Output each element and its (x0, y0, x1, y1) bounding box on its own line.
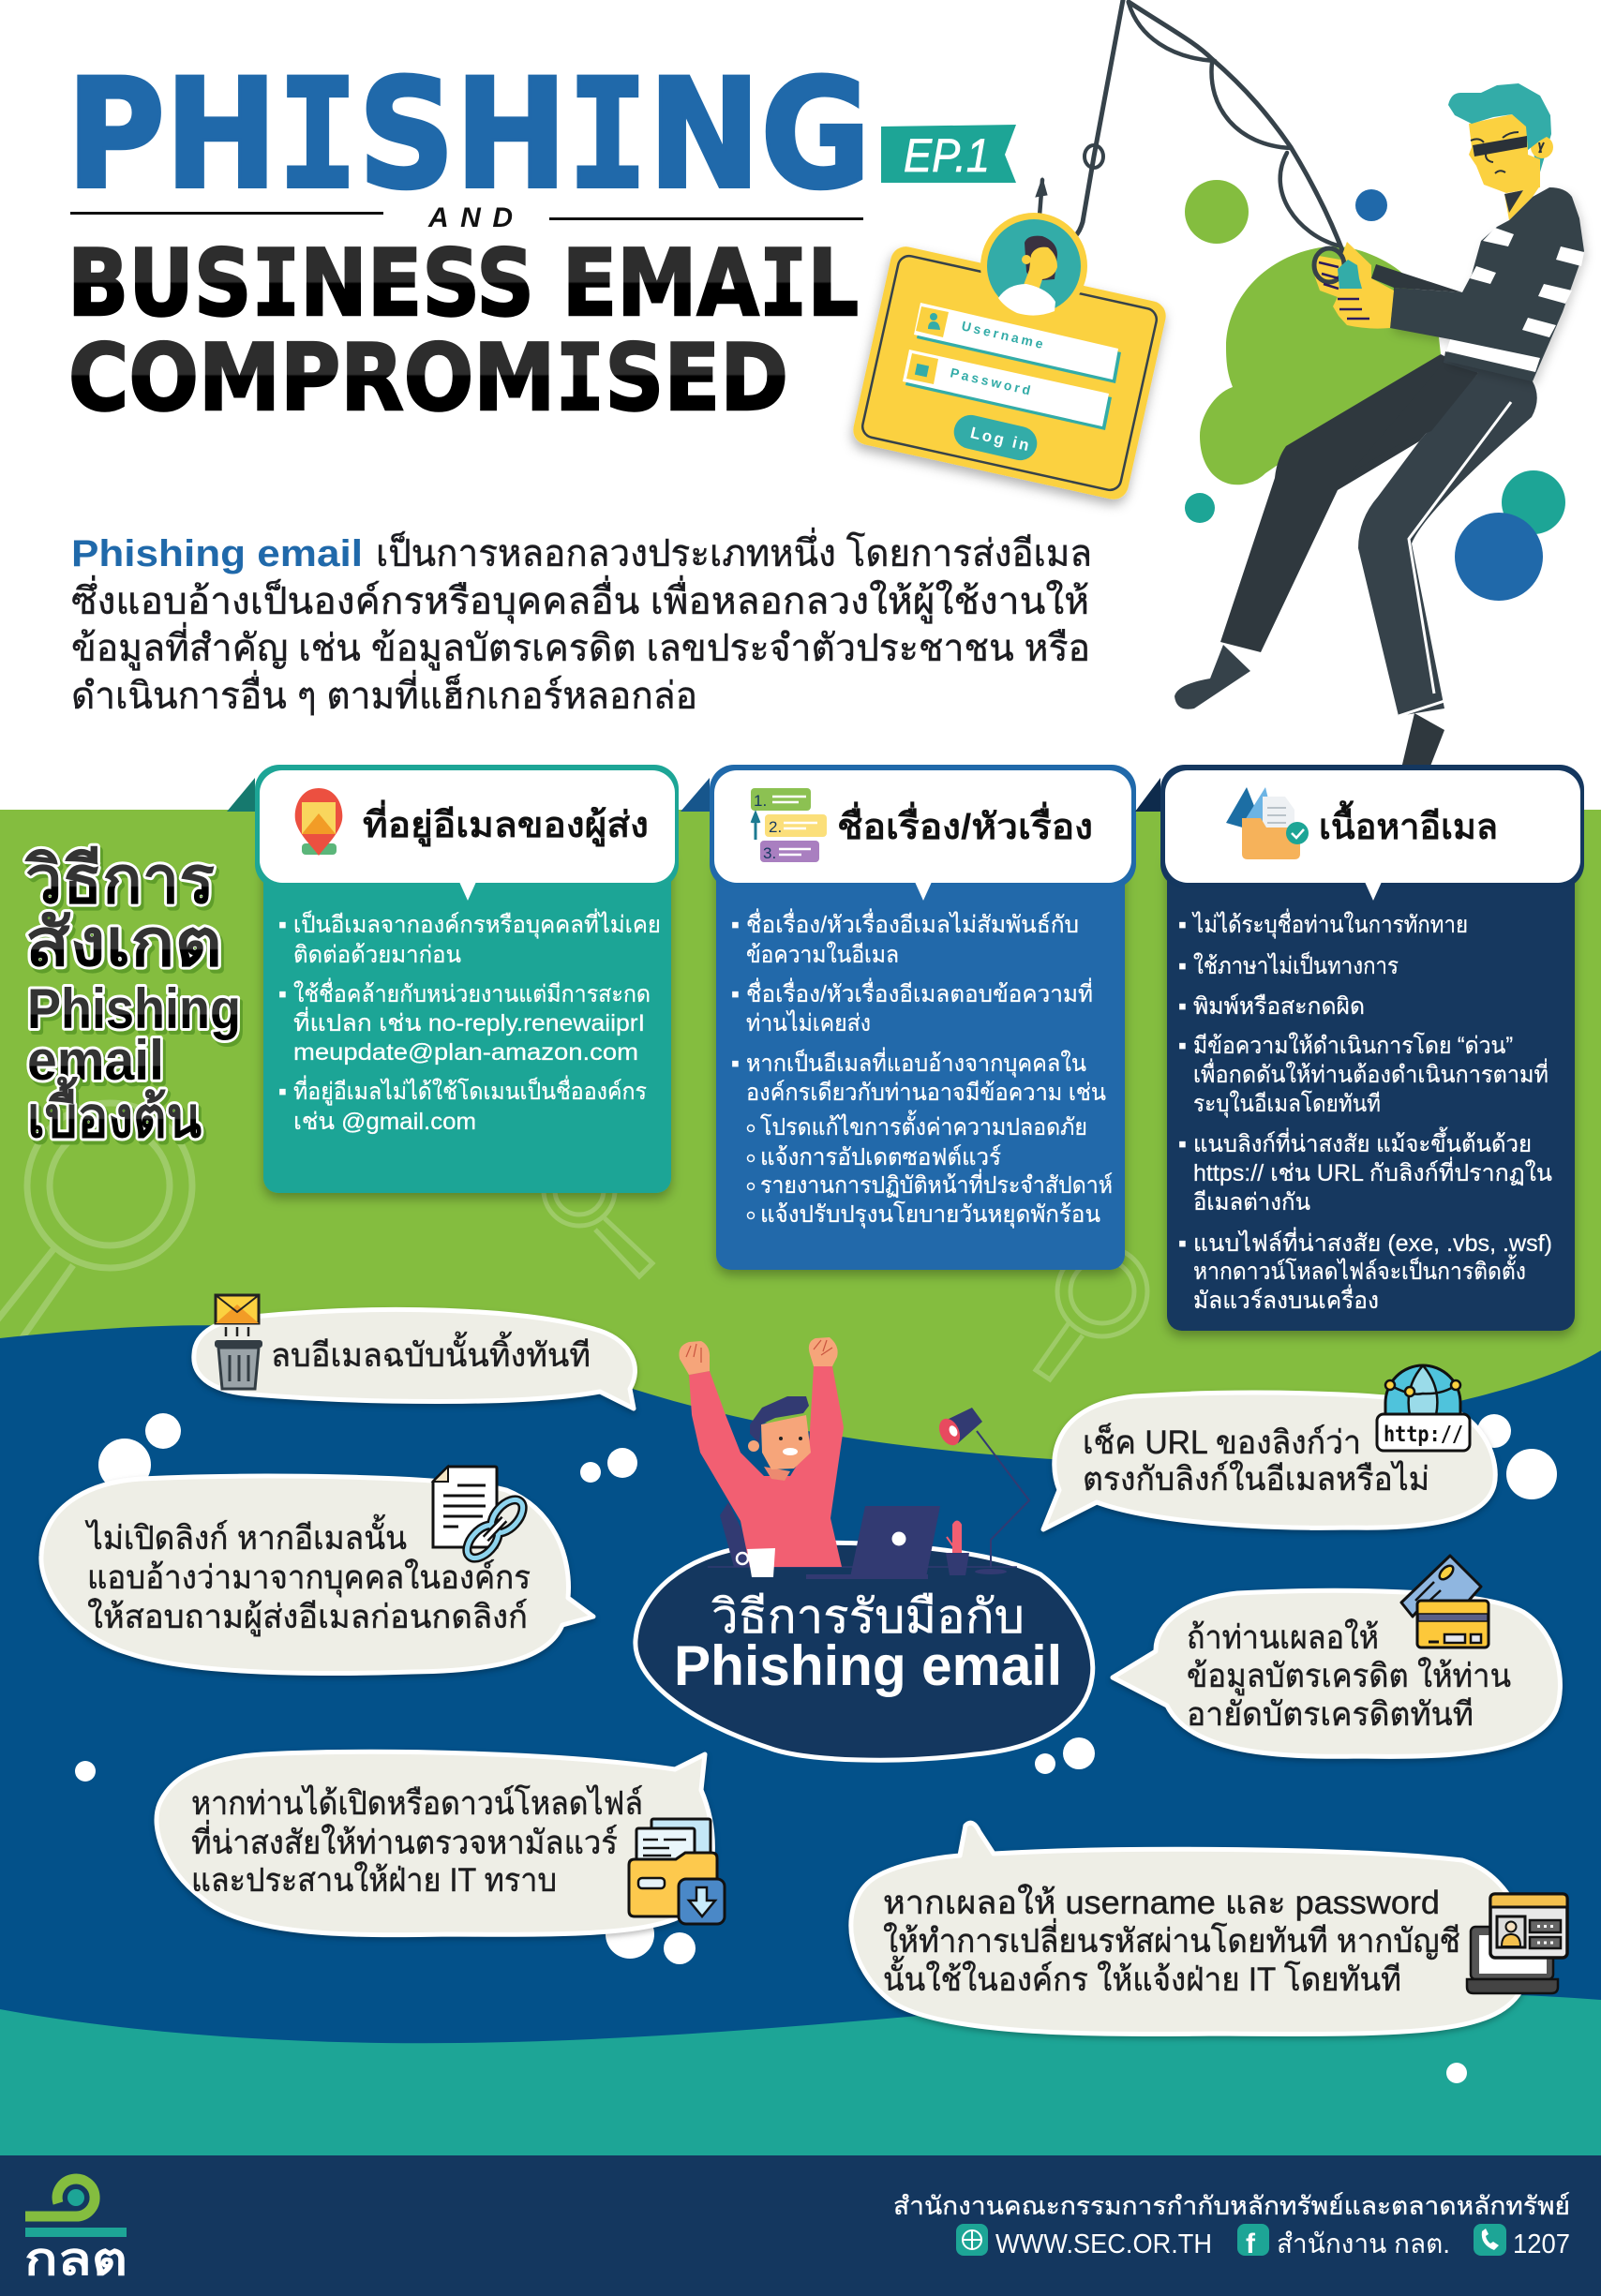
center bubble: how to respond: วิธีการรับมือกับ (711, 1590, 1025, 1643)
contact: facebook (1237, 2224, 1450, 2259)
table line (708, 1566, 1017, 1568)
contact: phone: 1207 (1513, 2229, 1570, 2259)
list: sender address: ▪ (278, 912, 287, 938)
panel: left heading: สังเกต (25, 906, 222, 979)
icon: credit cards (1401, 1556, 1489, 1647)
login button: Log in (968, 424, 1033, 455)
background: green section (0, 810, 1601, 1522)
intro paragraph (71, 528, 1092, 717)
icon: folder download (629, 1819, 725, 1924)
list: subject line: แจ้งปรับปรุงนโยบายวันหยุดพักร้อน (760, 1200, 1100, 1229)
username field (914, 303, 1121, 383)
list: subject line: หากเป็นอีเมลที่แอบอ้างจากบุคคลใน (746, 1047, 1086, 1078)
title: COMPROMISED: COMPROMISED (68, 325, 788, 432)
list: email content: ใช้ภาษาไม่เป็นทางการ (1193, 951, 1399, 979)
list: sender address: ที่แปลก เช่น no-reply.renewaiiprI (293, 1006, 645, 1036)
list: email content: แนบไฟล์ที่น่าสงสัย (exe, .vbs, .wsf) (1193, 1227, 1552, 1257)
panel: left heading (23, 843, 241, 1149)
list: sender address (278, 908, 661, 1135)
header: sender address: ที่อยู่อีเมลของผู้ส่ง (363, 799, 649, 847)
list: email content: ไม่ได้ระบุชื่อท่านในการทักทาย (1191, 908, 1468, 939)
head with mask (1448, 83, 1553, 220)
badge: EP.1 (881, 125, 1016, 183)
background: magnifier watermarks (0, 1103, 1147, 1379)
icon: location pin envelope (295, 788, 342, 856)
list: email content: มีข้อความให้ดำเนินการโดย “ด่วน” (1193, 1032, 1513, 1059)
list: subject line: ชื่อเรื่อง/หัวเรื่องอีเมลตอบข้อความที่ (746, 977, 1093, 1007)
illustration: login card on hook (850, 213, 1169, 502)
contact: phone (1474, 2224, 1570, 2259)
contact: website (956, 2224, 1212, 2259)
list: subject line: ▪ (731, 1051, 740, 1077)
header: subject line: ชื่อเรื่อง/หัวเรื่อง (837, 801, 1093, 847)
decorative white dots (75, 1413, 1557, 2083)
bubble: do not open link: แอบอ้างว่ามาจากบุคคลในองค์กร (87, 1558, 531, 1597)
list: email content: มัลแวร์ลงบนเครื่อง (1193, 1284, 1379, 1314)
cactus pot (946, 1522, 969, 1575)
neck (764, 1467, 790, 1481)
panel: left heading: Phishing (27, 977, 241, 1040)
list: email content: ▪ (1178, 1033, 1187, 1059)
bubble: do not open link: ให้สอบถามผู้ส่งอีเมลก่อนกดลิงก์ (87, 1598, 528, 1636)
password field: Password (949, 365, 1035, 398)
logo (24, 2179, 127, 2285)
background shapes (1185, 180, 1565, 601)
list: email content: พิมพ์หรือสะกดผิด (1193, 993, 1365, 1020)
sweater (689, 1366, 844, 1567)
bubble: delete email: ลบอีเมลฉบับนั้นทิ้งทันที (271, 1331, 591, 1374)
list: sender address: ▪ (278, 1079, 287, 1105)
panel: left heading: เบื้องต้น (27, 1076, 202, 1149)
title: AND with rules (70, 202, 863, 233)
background: blue wave (0, 1325, 1601, 2062)
icon: numbered list: 2. (769, 818, 782, 836)
list: email content: https:// เช่น URL กับลิงก์ที่ปรากฏใน (1193, 1156, 1552, 1186)
desk lamp (935, 1408, 1029, 1574)
icon: numbered list: 3. (763, 844, 776, 862)
header: email content (1160, 765, 1584, 901)
bubble: credit card: อายัดบัตรเครดิตทันที (1187, 1696, 1474, 1733)
list: sender address: เป็นอีเมลจากองค์กรหรือบุคคลที่ไม่เคย (293, 908, 661, 939)
panel: email content (1135, 765, 1584, 1331)
list: email content: หากดาวน์โหลดไฟล์จะเป็นการติดตั้ง (1193, 1254, 1526, 1285)
bubble: credit card (1113, 1556, 1560, 1756)
panel: subject line (681, 765, 1136, 1270)
reel and hand (1312, 242, 1394, 329)
list: email content: ▪ (1178, 1131, 1187, 1157)
logo: กลต (24, 2235, 127, 2285)
coffee mug (737, 1548, 775, 1577)
login button (950, 411, 1040, 464)
panel: left heading: วิธีการ (23, 843, 215, 917)
background: teal wave (0, 1993, 1601, 2165)
list: email content: แนบลิงก์ที่น่าสงสัย แม้จะขึ้นต้นด้วย (1193, 1126, 1532, 1157)
bubble: credit card: ข้อมูลบัตรเครดิต ให้ท่าน (1187, 1657, 1511, 1695)
bubble: changed password: นั้นใช้ในองค์กร ให้แจ้งฝ่าย IT โดยทันที (883, 1955, 1401, 1998)
icon: login window and laptop (1467, 1894, 1567, 1993)
list: subject line: รายงานการปฏิบัติหน้าที่ประจำสัปดาห์ (760, 1169, 1113, 1199)
card (850, 244, 1169, 502)
illustration: celebrating person at laptop (679, 1337, 1029, 1579)
list: subject line: ▪ (731, 912, 740, 938)
icon: document and chain link (433, 1467, 529, 1564)
username field: Username (960, 318, 1047, 352)
intro paragraph: ข้อมูลที่สำคัญ เช่น ข้อมูลบัตรเครดิต เลขประจำตัวประชาชน หรือ (71, 622, 1090, 670)
intro paragraph: ดำเนินการอื่น ๆ ตามที่แฮ็กเกอร์หลอกล่อ (71, 670, 697, 717)
list: sender address: ติดต่อด้วยมาก่อน (293, 942, 461, 968)
list: sender address: ที่อยู่อีเมลไม่ได้ใช้โดเมนเป็นชื่อองค์กร (293, 1075, 647, 1106)
bubble: delete email (194, 1295, 635, 1409)
header: sender address (255, 765, 679, 901)
center bubble: how to respond (636, 1543, 1093, 1760)
raised fists (679, 1341, 710, 1375)
fishing rod (1036, 0, 1343, 253)
list: email content: ระบุในอีเมลโดยทันที (1193, 1090, 1381, 1118)
torso (1390, 187, 1584, 381)
bubble: do not open link: ไม่เปิดลิงก์ หากอีเมลนั้น (84, 1513, 407, 1557)
bubble: open file: ที่น่าสงสัยให้ท่านตรวจหามัลแวร์ (191, 1820, 618, 1861)
list: email content: ▪ (1178, 953, 1187, 979)
bubble: open file (157, 1752, 725, 1935)
list: sender address: ▪ (278, 981, 287, 1007)
intro paragraph: Phishing email (71, 533, 363, 574)
bubble: check URL (1043, 1365, 1495, 1529)
icon: numbered list: 1. (754, 792, 767, 810)
title: BUSINESS EMAIL: BUSINESS EMAIL (67, 231, 859, 337)
contact: facebook: f (1246, 2229, 1256, 2259)
panel: sender address (227, 765, 679, 1193)
list: subject line: แจ้งการอัปเดตซอฟต์แวร์ (760, 1144, 1001, 1170)
list: subject line: ท่านไม่เคยส่ง (746, 1009, 871, 1036)
bubble: changed password (851, 1823, 1567, 2035)
bubble: check URL: เช็ค URL ของลิงก์ว่า (1083, 1423, 1361, 1461)
list: email content: ▪ (1178, 993, 1187, 1020)
badge: EP.1: EP.1 (904, 129, 990, 182)
title: PHISHING: PHISHING (67, 47, 871, 222)
list: email content: อีเมลต่างกัน (1193, 1189, 1310, 1215)
bubble: changed password: ให้ทำการเปลี่ยนรหัสผ่านโดยทันที หากบัญชี (883, 1918, 1460, 1960)
left leg and shoe (1220, 354, 1478, 652)
list: email content: เพื่อกดดันให้ท่านต้องดำเนินการตามที่ (1193, 1058, 1549, 1088)
intro paragraph: ซึ่งแอบอ้างเป็นองค์กรหรือบุคคลอื่น เพื่อหลอกลวงให้ผู้ใช้งานให้ (71, 575, 1089, 624)
torso stripes (1446, 228, 1584, 372)
list: email content (1178, 908, 1552, 1314)
panel: left heading: email (27, 1029, 164, 1092)
laptop (850, 1506, 940, 1577)
icon: numbered list (751, 788, 827, 862)
contact: website: WWW.SEC.OR.TH (995, 2229, 1212, 2259)
list: subject line: ▪ (731, 981, 740, 1007)
title: AND with rules: AND (427, 202, 513, 233)
bubble: credit card: ถ้าท่านเผลอให้ (1187, 1618, 1379, 1656)
list: sender address: meupdate@plan-amazon.com (293, 1039, 638, 1066)
bubble: check URL: ตรงกับลิงก์ในอีเมลหรือไม่ (1083, 1460, 1429, 1498)
list: email content: ▪ (1178, 912, 1187, 938)
right leg and shoe (1358, 351, 1537, 716)
list: subject line (731, 908, 1113, 1229)
list: sender address: เช่น @gmail.com (293, 1109, 476, 1135)
list: email content: ▪ (1178, 1230, 1187, 1257)
icon: globe and http: http:// (1384, 1423, 1463, 1447)
icon: globe and http (1377, 1365, 1470, 1451)
list: subject line: ข้อความในอีเมล (746, 941, 899, 968)
contact: facebook: สำนักงาน กลต. (1277, 2229, 1450, 2259)
list: subject line: องค์กรเดียวกับท่านอาจมีข้อความ เช่น (746, 1080, 1106, 1106)
list: subject line: โปรดแก้ไขการตั้งค่าความปลอดภัย (760, 1110, 1087, 1141)
avatar (980, 213, 1087, 320)
icon: envelope and trash can (215, 1295, 262, 1389)
intro paragraph: เป็นการหลอกลวงประเภทหนึ่ง โดยการส่งอีเมล (376, 528, 1092, 574)
center bubble: how to respond: Phishing email (674, 1634, 1062, 1697)
list: sender address: ใช้ชื่อคล้ายกับหน่วยงานแต่มีการสะกด (293, 977, 651, 1007)
bubble: open file: หากท่านได้เปิดหรือดาวน์โหลดไฟล์ (191, 1784, 643, 1822)
head (748, 1396, 811, 1469)
chair (720, 1502, 761, 1567)
illustration: hacker fishing (1036, 0, 1584, 768)
list: subject line: ชื่อเรื่อง/หัวเรื่องอีเมลไม่สัมพันธ์กับ (746, 908, 1079, 938)
bubble: open file: และประสานให้ฝ่าย IT ทราบ (191, 1861, 557, 1899)
bubble: changed password: หากเผลอให้ username และ password (883, 1884, 1440, 1921)
password field (903, 350, 1112, 430)
icon: folder with document (1226, 787, 1309, 859)
footer (0, 2155, 1601, 2296)
bubble: do not open link (41, 1467, 593, 1674)
header: email content: เนื้อหาอีเมล (1319, 800, 1498, 847)
back arm (1371, 264, 1462, 292)
agency name: สำนักงานคณะกรรมการกำกับหลักทรัพย์และตลาดหลักทรัพย์ (893, 2191, 1570, 2220)
header: subject line (710, 765, 1136, 901)
